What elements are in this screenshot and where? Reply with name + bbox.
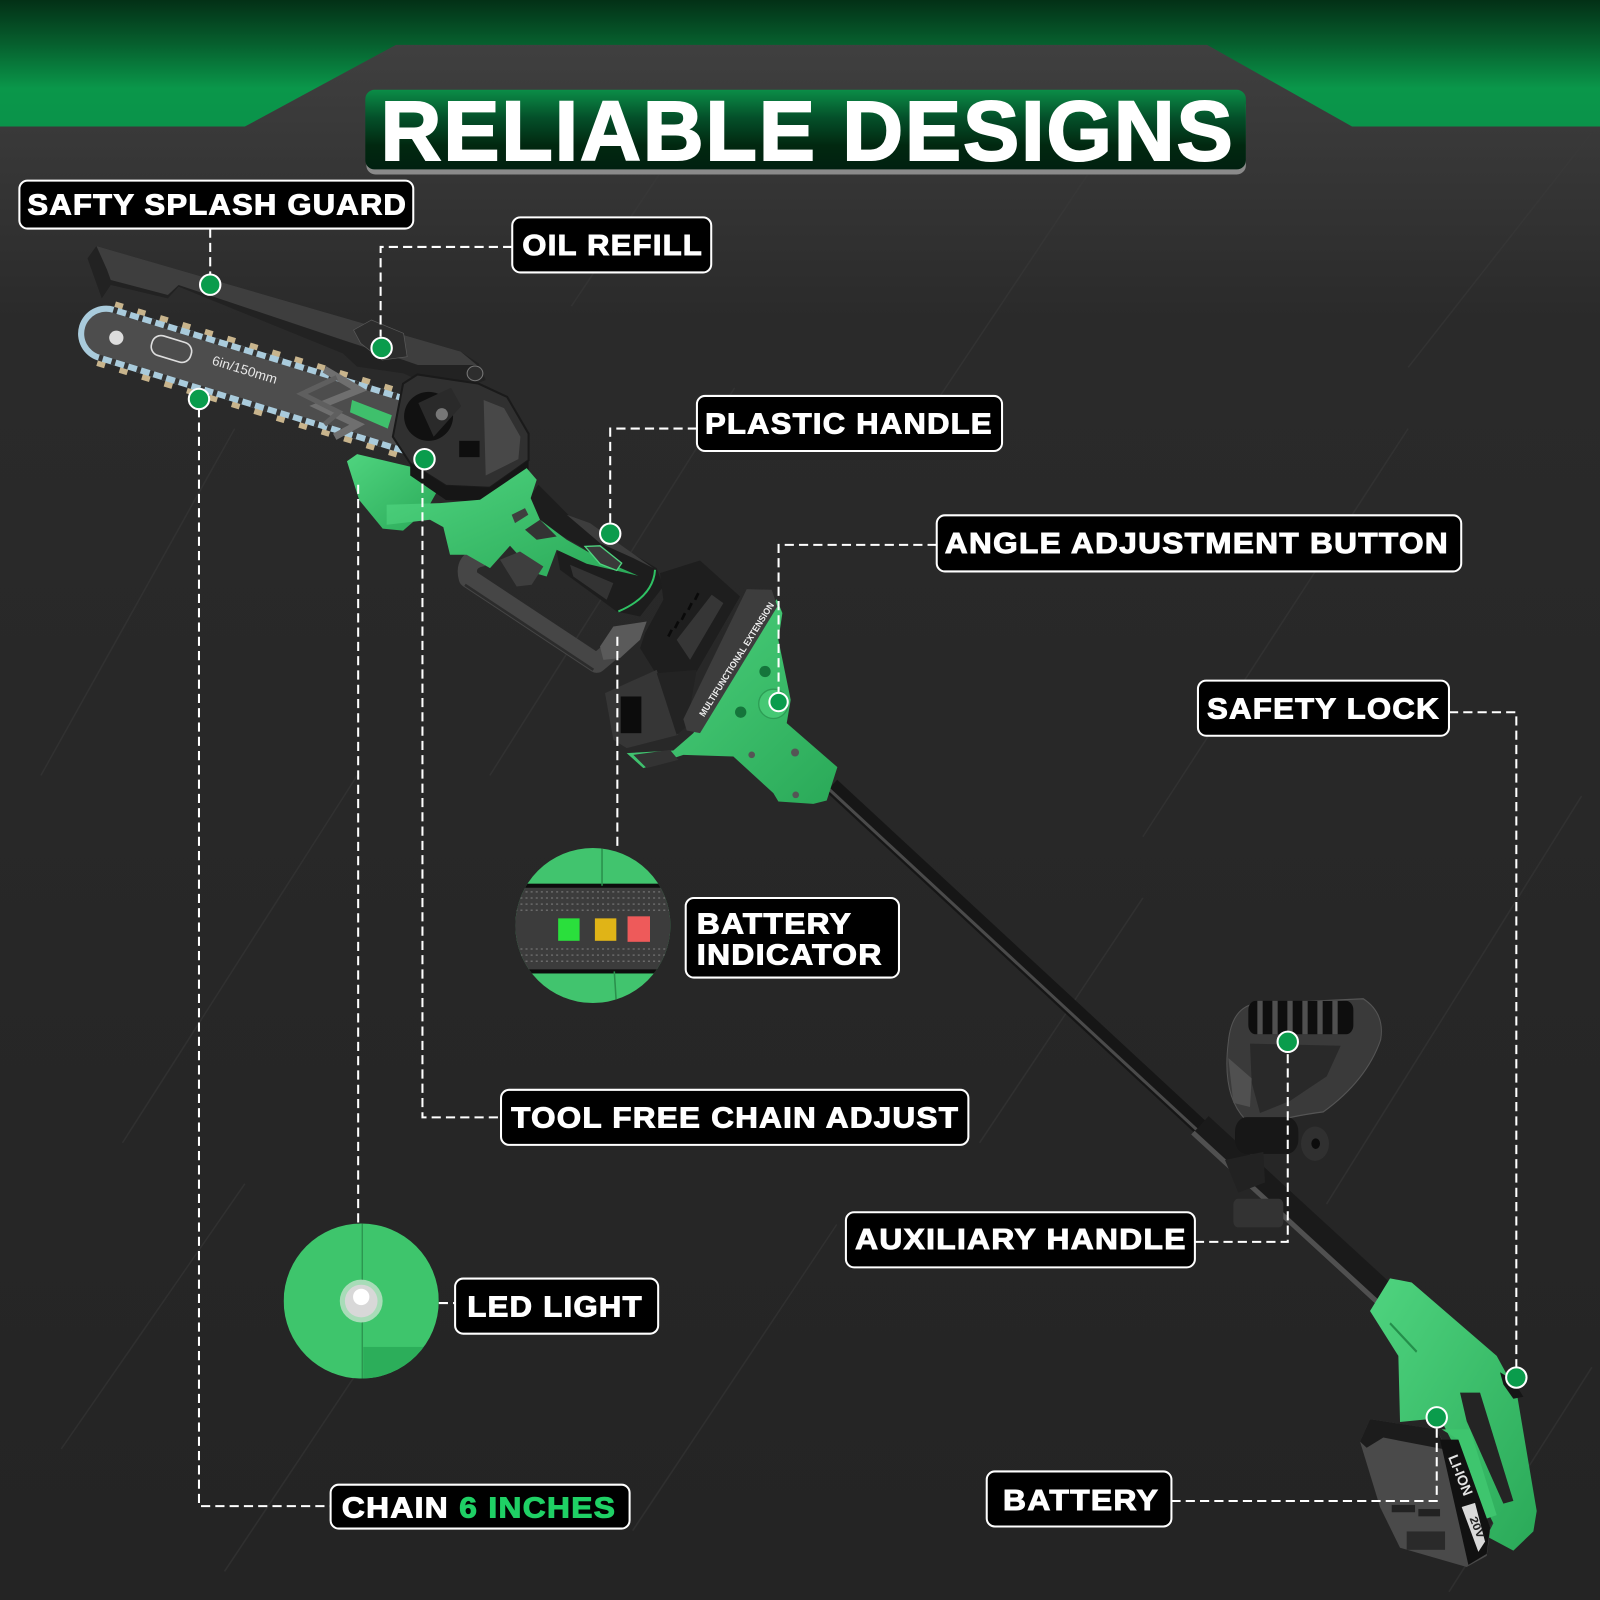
extension label text: MULTIFUNCTIONAL EXTENSION bbox=[697, 601, 776, 718]
marker dots bbox=[189, 274, 1527, 1428]
indicator: red bbox=[628, 916, 650, 942]
label: oil refill: OIL REFILL bbox=[522, 230, 703, 262]
indicator: green bbox=[558, 918, 580, 941]
label: battery indicator: BATTERY bbox=[697, 909, 852, 941]
label: battery indicator: INDICATOR bbox=[697, 939, 883, 971]
battery pack bbox=[1360, 1419, 1490, 1567]
port bbox=[605, 670, 678, 748]
green plate bbox=[627, 599, 837, 804]
label: tool free chain adjust: TOOL FREE CHAIN ADJUST bbox=[511, 1103, 959, 1135]
battery text bbox=[1444, 1453, 1486, 1541]
label: plastic handle bbox=[697, 396, 1002, 451]
connector: angle button bbox=[779, 545, 937, 694]
rear handle bbox=[1360, 1278, 1537, 1567]
label: battery: BATTERY bbox=[1003, 1485, 1159, 1517]
label: auxiliary handle bbox=[846, 1212, 1195, 1267]
clamp and knob bbox=[1235, 1117, 1298, 1154]
connector: battery bbox=[1171, 1427, 1437, 1501]
saw logo on bar bbox=[149, 333, 194, 365]
connector: LED light up bbox=[357, 485, 359, 1224]
label: safty splash guard: SAFTY SPLASH GUARD bbox=[28, 189, 407, 221]
connector: tool free chain adjust bbox=[422, 469, 501, 1117]
splash guard bbox=[88, 246, 486, 388]
battery text: LI-ION bbox=[1444, 1453, 1475, 1498]
label: auxiliary handle: AUXILIARY HANDLE bbox=[855, 1224, 1187, 1256]
label: oil refill bbox=[512, 217, 711, 272]
battery indicator callout circle bbox=[515, 848, 670, 1003]
D guard handle bbox=[467, 556, 617, 663]
title banner: RELIABLE DESIGNS bbox=[381, 83, 1235, 178]
label strip bbox=[683, 589, 777, 733]
connector: LED light label bbox=[439, 1302, 455, 1304]
indicator: amber bbox=[595, 918, 616, 941]
green gear wheel bbox=[347, 454, 441, 531]
chainsaw bar and chain bbox=[106, 331, 413, 437]
chainsaw head cover bbox=[393, 374, 529, 502]
connector: chain bbox=[199, 408, 331, 1506]
black battery head bbox=[640, 560, 740, 675]
label: chain 6 inches: CHAIN 6 INCHES bbox=[342, 1492, 616, 1524]
bar size text: 6in/150mm bbox=[210, 353, 279, 387]
connector: safety lock bbox=[1449, 712, 1516, 1369]
label: LED light: LED LIGHT bbox=[467, 1291, 643, 1323]
label: battery bbox=[987, 1471, 1171, 1527]
label: safety lock: SAFETY LOCK bbox=[1207, 693, 1440, 725]
green frame bbox=[387, 468, 638, 576]
connector: oil refill bbox=[381, 247, 512, 337]
battery text: 20V bbox=[1467, 1515, 1486, 1541]
upper tube and rear grip bbox=[530, 485, 663, 616]
label: tool free chain adjust bbox=[501, 1090, 968, 1145]
pole bbox=[829, 786, 1400, 1316]
label: angle adjustment button bbox=[937, 515, 1461, 571]
connector: plastic handle bbox=[610, 429, 697, 526]
auxiliary handle bbox=[1225, 999, 1381, 1227]
label: safty splash guard bbox=[19, 181, 413, 229]
switch pad bbox=[600, 621, 647, 660]
label: angle adjustment button: ANGLE ADJUSTMENT BUTTON bbox=[945, 528, 1449, 560]
label: battery indicator bbox=[686, 898, 899, 978]
connector: auxiliary handle bbox=[1195, 1051, 1288, 1242]
label: chain 6 inches bbox=[331, 1485, 630, 1529]
label: LED light bbox=[455, 1279, 658, 1334]
label: plastic handle: PLASTIC HANDLE bbox=[705, 409, 993, 441]
connector: splash guard bbox=[209, 229, 211, 276]
connector: battery indicator bbox=[616, 637, 618, 849]
chainsaw main body bbox=[387, 468, 837, 804]
label: safety lock bbox=[1198, 681, 1449, 736]
LED light callout circle bbox=[284, 1223, 439, 1379]
header green band bbox=[0, 0, 1600, 127]
